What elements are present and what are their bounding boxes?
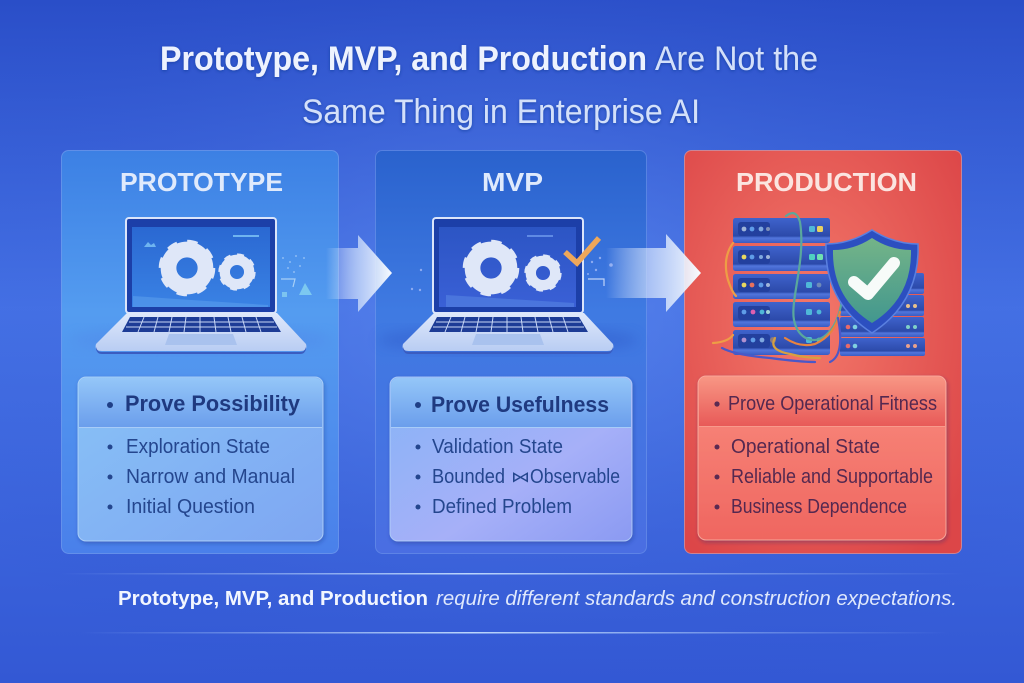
footer statement <box>118 588 957 610</box>
heading: mvp: MVP <box>482 167 543 197</box>
icon: laptop with gears <box>71 217 331 354</box>
text box: prototype: Exploration State <box>126 436 270 458</box>
icon: orange check <box>565 238 599 263</box>
text box: production: Prove Operational Fitness <box>728 393 937 415</box>
icon: server racks and shield <box>713 213 925 362</box>
text box: prototype: Narrow and Manual <box>126 466 295 488</box>
cables <box>713 213 842 362</box>
icon: laptop with gears and check <box>378 217 638 354</box>
text box: production <box>698 376 946 540</box>
text box: mvp: Validation State <box>432 436 563 458</box>
footer statement: require different standards and construction expectations. <box>436 588 957 610</box>
arrow: prototype to mvp <box>326 235 392 312</box>
footer divider bottom <box>80 632 950 634</box>
footer statement: Prototype, MVP, and Production <box>118 588 428 610</box>
arrow: mvp to production <box>606 234 701 312</box>
text box: prototype: Prove Possibility <box>125 391 301 416</box>
title: Same Thing in Enterprise AI <box>302 93 700 131</box>
text box: mvp: Observable <box>530 466 620 488</box>
title: Prototype, MVP, and Production <box>160 40 647 78</box>
left server stack <box>733 218 830 355</box>
text box: mvp: Bounded <box>432 466 505 488</box>
text box: prototype: Initial Question <box>126 496 255 518</box>
text box: mvp: ⋈ <box>511 469 530 486</box>
text box: mvp <box>390 377 632 541</box>
title: Are Not the <box>655 40 818 78</box>
right server stack <box>840 273 925 356</box>
icon: shield with check <box>826 230 918 333</box>
footer divider top <box>60 573 965 574</box>
panel: production <box>684 150 962 554</box>
title <box>160 40 818 131</box>
heading: prototype: PROTOTYPE <box>120 167 283 197</box>
text box: mvp: Defined Problem <box>432 496 572 518</box>
panel: prototype <box>62 150 338 554</box>
text box: production: Business Dependence <box>731 496 907 518</box>
text box: production: Reliable and Supportable <box>731 466 933 488</box>
text box: production: Operational State <box>731 436 880 458</box>
heading: production: PRODUCTION <box>736 167 917 197</box>
panel: mvp <box>376 150 646 554</box>
text box: prototype <box>78 377 323 541</box>
text box: mvp: Prove Usefulness <box>431 392 609 417</box>
